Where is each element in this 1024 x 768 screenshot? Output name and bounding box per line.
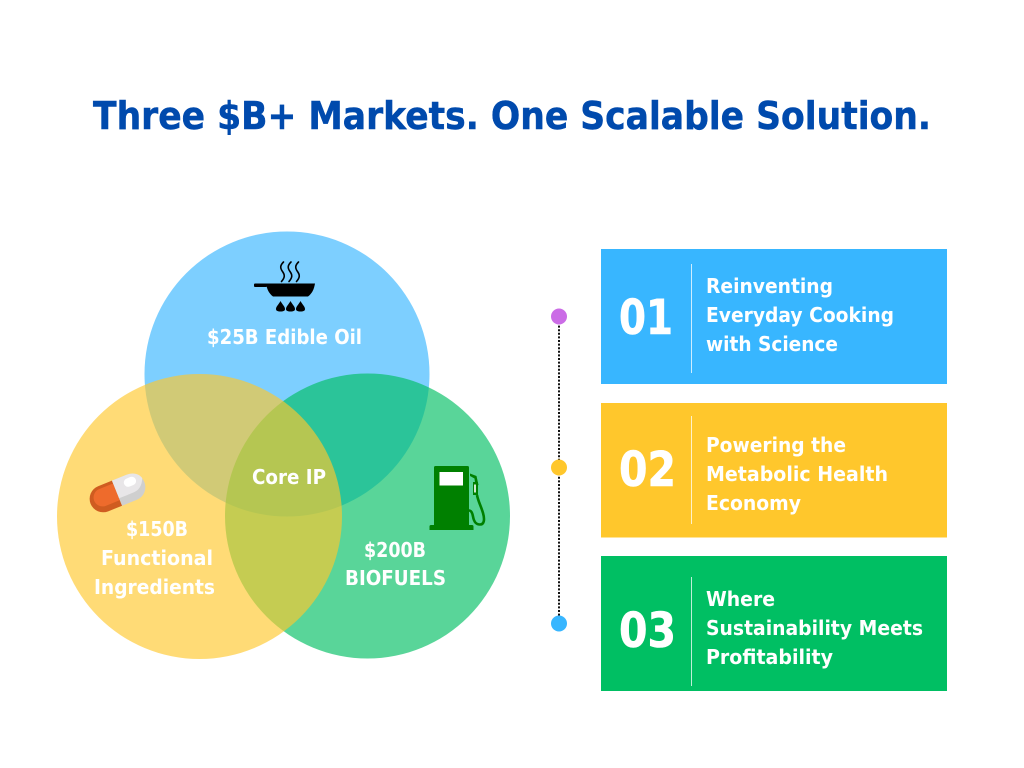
text: reinventing cooking: with Science	[706, 332, 838, 356]
title: Three $B+ Markets. One Scalable Solution.	[93, 94, 931, 139]
label: biofuels: BIOFUELS	[345, 566, 446, 590]
icon: fuel pump	[430, 466, 484, 530]
circle: edible oil	[144, 232, 430, 516]
text: sustainability: Where	[706, 587, 775, 611]
text: metabolic health: Metabolic Health	[706, 462, 888, 486]
circle: biofuels	[225, 374, 510, 658]
text: reinventing cooking	[706, 274, 894, 356]
text: reinventing cooking: Everyday Cooking	[706, 303, 894, 327]
label: edible oil: $25B Edible Oil	[207, 325, 362, 349]
label: functional ingredients: $150B	[126, 517, 188, 541]
number 02: 02	[619, 442, 676, 498]
panel: 01	[601, 249, 947, 384]
text: sustainability: Profitability	[706, 645, 833, 669]
label: core ip: Core IP	[252, 465, 326, 489]
panel: 02	[601, 403, 947, 538]
timeline dot 2	[551, 460, 567, 476]
text: metabolic health: Powering the	[706, 433, 846, 457]
icon: capsule	[86, 470, 149, 516]
panel: 03	[601, 556, 947, 691]
number 01: 01	[619, 290, 673, 346]
venn diagram	[57, 232, 510, 659]
text: sustainability: Sustainability Meets	[706, 616, 923, 640]
label: functional ingredients: Ingredients	[94, 575, 215, 599]
text: metabolic health	[706, 433, 888, 515]
timeline	[551, 308, 567, 632]
text: reinventing cooking: Reinventing	[706, 274, 833, 298]
timeline dot 1	[551, 308, 567, 324]
circle: functional ingredients	[57, 374, 342, 659]
label: biofuels	[345, 538, 446, 590]
label: functional ingredients	[94, 517, 215, 599]
label: biofuels: $200B	[364, 538, 426, 562]
label: functional ingredients: Functional	[101, 546, 213, 570]
timeline dot 3	[551, 616, 567, 632]
text: metabolic health: Economy	[706, 491, 801, 515]
number 03: 03	[619, 603, 676, 659]
text: sustainability	[706, 587, 923, 669]
icon: frying pan	[254, 262, 315, 312]
